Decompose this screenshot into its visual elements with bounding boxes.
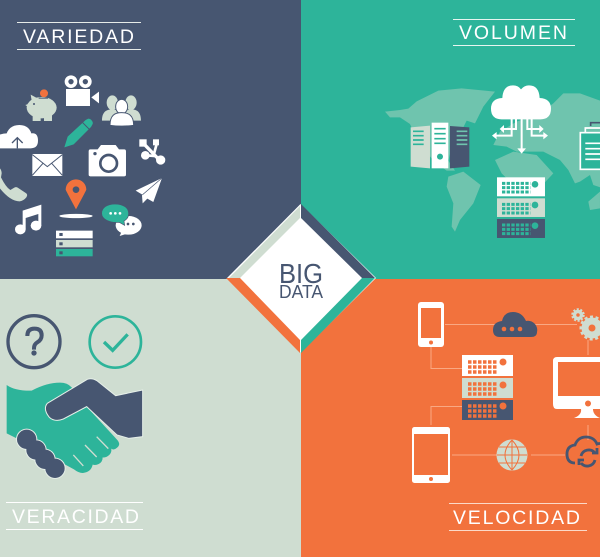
icon: handshake xyxy=(7,379,143,479)
icon: server towers xyxy=(411,123,469,168)
icon: cloud with dots xyxy=(493,312,537,337)
text: data: DATA xyxy=(279,282,323,302)
panel: velocidad background xyxy=(301,279,600,557)
band: top-right navy xyxy=(301,204,375,278)
icon: photo camera xyxy=(89,145,126,176)
band: bottom-left orange xyxy=(226,278,300,353)
heading: variedad: VARIEDAD xyxy=(23,26,134,48)
icon: gears xyxy=(572,310,600,339)
icon: location pin xyxy=(59,179,93,218)
icon: pencil xyxy=(64,119,93,147)
icon: upload cloud xyxy=(0,125,38,148)
icon: people group xyxy=(102,95,141,126)
icon: cloud with arrows xyxy=(491,85,551,154)
icon: question mark circle xyxy=(8,316,60,368)
connector lines xyxy=(431,324,588,455)
icon: check mark circle xyxy=(90,316,141,368)
icon: sync cloud xyxy=(567,437,600,466)
variedad icons xyxy=(0,75,165,256)
icon: tablet xyxy=(412,427,450,483)
icon: chat bubbles xyxy=(102,204,142,236)
icon: music note xyxy=(15,205,41,234)
icon: usb symbol xyxy=(139,139,165,165)
icon: video camera xyxy=(65,75,99,106)
icon: document clipboard xyxy=(580,123,600,169)
panel: variedad background xyxy=(0,0,301,279)
icon: desktop monitor xyxy=(553,357,600,418)
icon: envelope xyxy=(32,154,62,176)
icon: telephone xyxy=(0,167,27,201)
diamond outer white edge xyxy=(227,204,376,352)
panel: veracidad background xyxy=(0,279,301,557)
band: bottom-right teal xyxy=(301,278,375,353)
volumen illustration xyxy=(385,85,600,238)
heading: veracidad: VERACIDAD xyxy=(12,506,139,528)
heading: velocidad: VELOCIDAD xyxy=(453,507,580,529)
icon: rack servers xyxy=(497,177,545,238)
icon: globe xyxy=(496,440,528,470)
icon: paper plane xyxy=(136,178,162,203)
veracidad illustration xyxy=(7,316,143,479)
icon: smartphone xyxy=(418,302,444,347)
panel: volumen background xyxy=(301,0,600,279)
heading: volumen: VOLUMEN xyxy=(459,22,567,44)
center diamond: big data xyxy=(226,204,376,353)
band: top-left light green xyxy=(229,206,300,278)
icon: rack servers xyxy=(462,355,513,420)
icon: database stack xyxy=(56,231,93,256)
velocidad illustration xyxy=(412,302,600,483)
icon: piggy bank xyxy=(25,89,57,121)
world map xyxy=(385,88,600,232)
text: big: BIG xyxy=(279,258,323,289)
